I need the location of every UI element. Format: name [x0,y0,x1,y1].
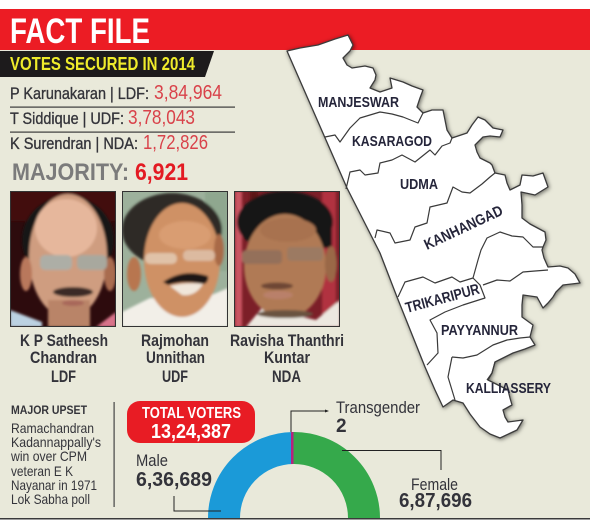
photo: Ravisha Thanthri Kuntar [234,191,340,327]
candidate name: Ravisha Thanthri Kuntar: Ravisha Thanthri [230,331,344,350]
total voters badge: 13,24,387 [151,421,231,443]
map labels: KALLIASSERY [466,380,551,397]
votes list [10,82,235,154]
photo: K P Satheesh Chandran [10,191,116,327]
votes list: 3,78,043 [128,107,195,129]
donut chart: voters by gender [224,432,364,518]
label: male [136,451,221,511]
title banner [0,9,590,51]
candidate name: K P Satheesh Chandran: Chandran [30,348,97,367]
candidate name: K P Satheesh Chandran [20,331,108,386]
candidate name: Rajmohan Unnithan: Rajmohan [141,331,209,350]
label: transgender: Transgender [336,398,420,417]
map labels: MANJESWAR [318,94,399,111]
candidate name: Rajmohan Unnithan: Unnithan [146,348,205,367]
text block: major upset: Lok Sabha poll [11,491,90,507]
label: female [342,450,472,512]
label: female: Female [411,475,458,494]
candidate name: Ravisha Thanthri Kuntar [230,331,344,386]
text block: major upset: win over CPM [10,448,87,464]
map labels: KANHANGAD [422,202,506,254]
majority figure: MAJORITY: [12,159,129,186]
candidate name: K P Satheesh Chandran: K P Satheesh [20,331,108,350]
subheading: votes secured in 2014: VOTES SECURED IN 2014 [10,54,195,74]
votes list: K Surendran | NDA: [10,134,138,153]
label: male: Male [136,451,168,470]
text block: major upset: MAJOR UPSET [11,403,88,417]
candidate name: Rajmohan Unnithan [141,331,209,386]
votes list: 3,84,964 [154,82,222,104]
map of constituency segments [287,35,580,438]
candidate name: Ravisha Thanthri Kuntar: Kuntar [264,348,310,367]
subheading: votes secured in 2014 [0,51,214,77]
map labels [318,94,551,397]
total voters badge: TOTAL VOTERS [142,405,241,422]
text block: major upset: Nayanar in 1971 [11,477,97,493]
text block: major upset: Ramachandran [11,420,94,436]
photo: Rajmohan Unnithan [122,191,228,327]
label: transgender [291,398,420,437]
candidate name: Rajmohan Unnithan: UDF [162,367,188,386]
candidate name: K P Satheesh Chandran: LDF [51,367,76,386]
map labels: TRIKARIPUR [404,281,482,317]
text block: major upset: veteran E K [11,463,74,479]
map labels: PAYYANNUR [441,322,518,339]
votes list: T Siddique | UDF: [10,109,124,128]
votes list: 1,72,826 [143,132,208,154]
label: transgender: 2 [336,416,347,437]
map inner boundaries [325,112,548,400]
map outline [287,35,580,438]
map labels: UDMA [400,176,438,193]
text block: major upset [10,403,101,507]
map labels: KASARAGOD [352,133,432,150]
label: female: 6,87,696 [399,490,472,512]
majority figure: 6,921 [135,159,188,186]
total voters badge [127,401,255,443]
label: male: 6,36,689 [136,469,212,491]
text block: major upset: Kadannappally's [11,434,101,450]
votes list: P Karunakaran | LDF: [10,84,149,103]
candidate name: Ravisha Thanthri Kuntar: NDA [272,367,301,386]
title banner: FACT FILE [10,12,150,51]
